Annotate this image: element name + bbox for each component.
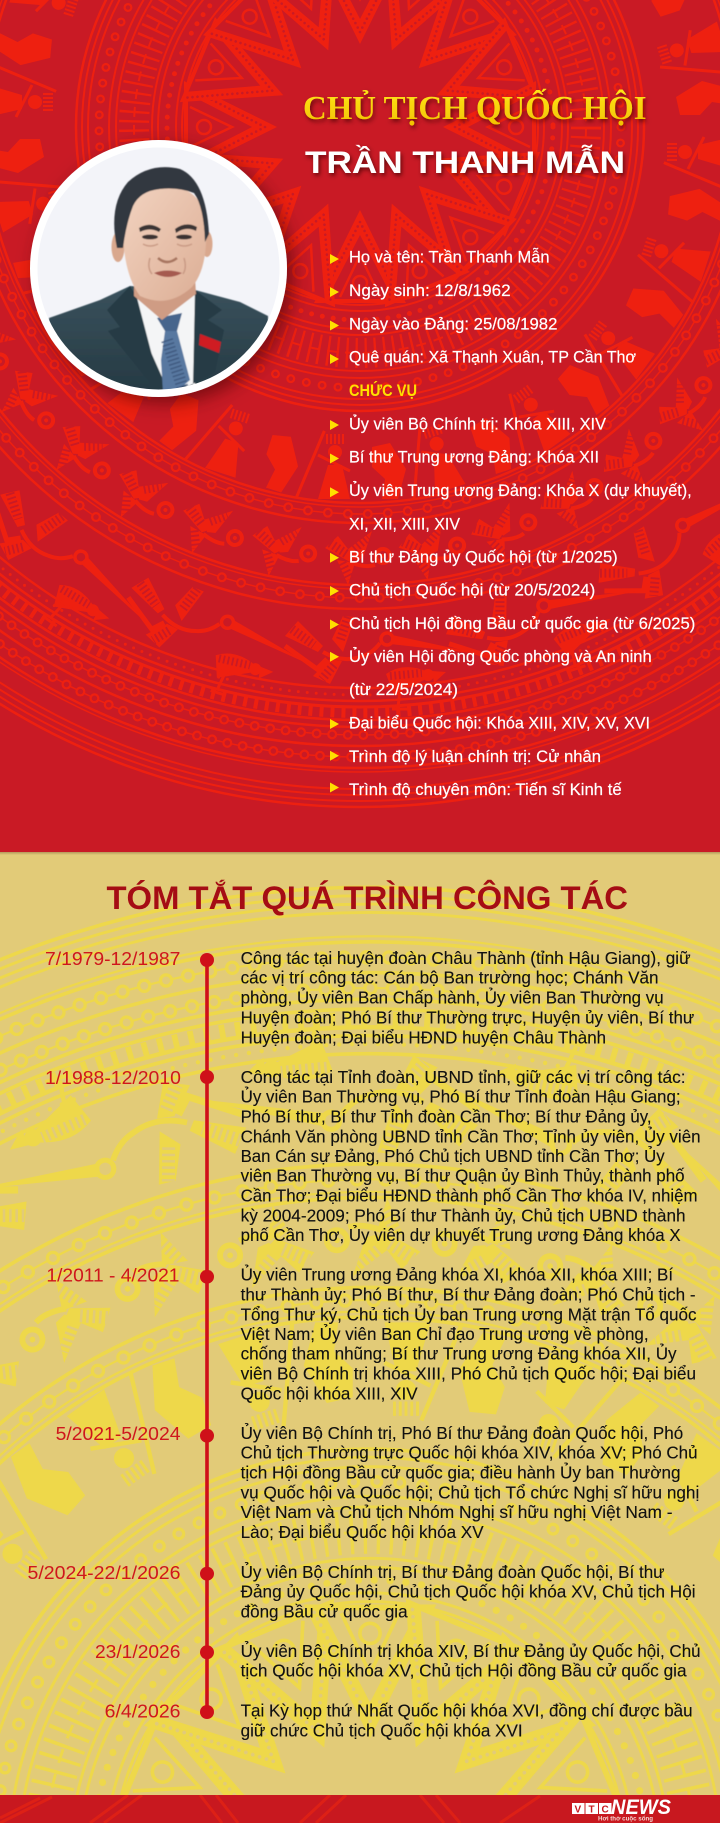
timeline entry: 5/2024-22/1/2026: Đảng ủy Quốc hội, Chủ tịch Quốc hội khóa XV, Chủ tịch Hội [241,1582,696,1602]
title: Trần Thanh Mẫn: TRẦN THANH MẪN [305,144,625,180]
timeline entry: 6/4/2026 [105,1701,693,1740]
timeline entry: 5/2024-22/1/2026 [28,1561,696,1622]
timeline entry: 7/1979-12/1987: 7/1979-12/1987 [45,949,180,969]
list item: Central Committee: XI, XII, XIII, XIV [349,514,461,533]
list item: full name: Họ và tên: Trần Thanh Mẫn [349,248,550,267]
timeline entry: 1/1988-12/2010 [45,1067,701,1245]
timeline entry: 5/2024-22/1/2026: Ủy viên Bộ Chính trị, Bí thư Đảng đoàn Quốc hội, Bí thư [241,1561,665,1582]
timeline entry: 6/4/2026: 6/4/2026 [105,1702,180,1722]
timeline entry: 5/2021-5/2024: Lào; Đại biểu Quốc hội khóa XV [241,1522,484,1542]
timeline entry: 5/2021-5/2024: Ủy viên Bộ Chính trị, Phó Bí thư Đảng đoàn Quốc hội, Phó [241,1422,683,1443]
timeline entry: 23/1/2026: Ủy viên Bộ Chính trị khóa XIV, Bí thư Đảng ủy Quốc hội, Chủ [241,1640,701,1661]
timeline [28,948,701,1740]
timeline entry: 1/1988-12/2010: Công tác tại Tỉnh đoàn, UBND tỉnh, giữ các vị trí công tác: [241,1067,686,1087]
timeline entry: 1/1988-12/2010: Phó Bí thư, Bí thư Tỉnh đoàn Cần Thơ; Bí thư Đảng ủy, [241,1106,652,1126]
heading: career summary: TÓM TẮT QUÁ TRÌNH CÔNG TÁC [106,880,628,916]
timeline entry: 1/1988-12/2010: Ủy viên Ban Thường vụ, Phó Bí thư Tỉnh đoàn Hậu Giang; [241,1086,681,1107]
list item: Central Committee: Ủy viên Trung ương Đảng: Khóa X (dự khuyết), [349,481,692,500]
timeline entry: 5/2024-22/1/2026: 5/2024-22/1/2026 [28,1563,180,1583]
timeline entry: 23/1/2026: 23/1/2026 [95,1642,180,1662]
list item: party admission date: Ngày vào Đảng: 25/08/1982 [349,314,557,333]
list item: political theory level: Trình độ lý luận chính trị: Cử nhân [349,747,601,766]
panel: career section background [0,852,720,1795]
list item: hometown: Quê quán: Xã Thạnh Xuân, TP Cần Thơ [349,348,636,367]
list item: election council chairman: Chủ tịch Hội đồng Bầu cử quốc gia (từ 6/2025) [349,614,695,633]
subheading: positions: CHỨC VỤ [349,381,417,400]
timeline entry: 1/2011 - 4/2021: 1/2011 - 4/2021 [46,1266,180,1286]
timeline entry: 1/1988-12/2010: Cần Thơ; Đại biểu HĐND thành phố Cần Thơ khóa IV, nhiệm [241,1186,698,1206]
portrait photo in white circular frame [30,140,290,400]
list item: professional level: Trình độ chuyên môn: Tiến sĩ Kinh tế [349,780,622,799]
timeline entry: 1/2011 - 4/2021: thư Thành ủy; Phó Bí thư, Bí thư Đảng đoàn; Phó Chủ tịch - [241,1284,696,1304]
logo: VTC News: T [588,1804,595,1816]
timeline entry: 1/2011 - 4/2021: chống tham nhũng; Bí thư Trung ương Đảng khóa XII, Ủy [241,1343,677,1364]
list item: Central Committee [330,481,692,533]
timeline entry: 1/1988-12/2010: 1/1988-12/2010 [45,1068,181,1088]
list item: National Assembly deputy: Đại biểu Quốc hội: Khóa XIII, XIV, XV, XVI [349,714,650,733]
timeline entry: 1/1988-12/2010: Ban Cán sự Đảng, Phó Chủ tịch UBND tỉnh Cần Thơ; Ủy [241,1145,665,1166]
timeline entry: 5/2021-5/2024: Việt Nam và Chủ tịch Nhóm Nghị sĩ hữu nghị Việt Nam - [241,1502,673,1522]
timeline entry: 5/2021-5/2024: vụ Quốc hội và Quốc hội; Chủ tịch Tổ chức Nghị sĩ hữu nghị [241,1482,699,1502]
timeline entry: 6/4/2026: giữ chức Chủ tịch Quốc hội khóa XVI [241,1720,523,1740]
list item: defence and security council: (từ 22/5/2024) [349,680,458,699]
panel: footer band [0,1795,720,1823]
timeline entry: 5/2024-22/1/2026: đồng Bầu cử quốc gia [241,1602,408,1622]
timeline entry: 1/2011 - 4/2021: Ủy viên Trung ương Đảng khóa XI, khóa XII, khóa XIII; Bí [241,1264,673,1285]
logo: VTC News: Hơi thở cuộc sống [598,1814,653,1822]
timeline entry: 7/1979-12/1987: Huyện đoàn; Phó Bí thư Thường trực, Huyện ủy viên, Bí thư [241,1007,694,1027]
timeline entry: 1/2011 - 4/2021: Quốc hội khóa XIII, XIV [241,1383,418,1403]
timeline entry: 6/4/2026: Tại Kỳ họp thứ Nhất Quốc hội khóa XVI, đồng chí được bầu [241,1701,693,1721]
timeline entry: 7/1979-12/1987: các vị trí công tác: Cán bộ Ban trường học; Chánh Văn [241,968,659,988]
timeline entry: 1/1988-12/2010: phố Cần Thơ, Ủy viên dự khuyết Trung ương Đảng khóa X [241,1224,681,1245]
timeline entry: 7/1979-12/1987 [45,948,694,1047]
logo: VTC News: C [602,1804,609,1816]
timeline entry: 7/1979-12/1987: phòng, Ủy viên Ban Chấp hành, Ủy viên Ban Thường vụ [241,987,664,1008]
list item: Party Committee secretary: Bí thư Đảng ủy Quốc hội (từ 1/2025) [349,548,618,567]
timeline entry: 1/2011 - 4/2021 [46,1264,697,1403]
logo: VTC News: V [574,1804,582,1816]
timeline entry: 5/2021-5/2024 [56,1422,699,1542]
timeline entry: 5/2021-5/2024: tịch Hội đồng Bầu cử quốc gia; điều hành Ủy ban Thường [241,1462,681,1483]
timeline entry: 1/2011 - 4/2021: viên Bộ Chính trị khóa XIII, Phó Chủ tịch Quốc hội; Đại biểu [241,1364,696,1384]
list item: defence and security council [330,647,652,699]
timeline entry: 23/1/2026 [95,1640,701,1681]
personal information list [330,248,695,799]
logo: VTC News: NEWS [611,1796,671,1819]
timeline entry: 5/2021-5/2024: 5/2021-5/2024 [56,1424,180,1444]
timeline entry: 1/1988-12/2010: viên Ban Thường vụ, Bí thư Quận ủy Bình Thủy, thành phố [241,1166,685,1186]
timeline entry: 1/1988-12/2010: kỳ 2004-2009; Phó Bí thư Thành ủy, Chủ tịch UBND thành [241,1205,686,1225]
panel: profile section background [0,0,720,852]
timeline entry: 1/2011 - 4/2021: Tổng Thư ký, Chủ tịch Ủy ban Trung ương Mặt trận Tổ quốc [241,1303,697,1324]
list item: Secretariat: Bí thư Trung ương Đảng: Khóa XII [349,448,599,467]
timeline entry: 7/1979-12/1987: Công tác tại huyện đoàn Châu Thành (tỉnh Hậu Giang), giữ [241,948,691,968]
timeline entry: 7/1979-12/1987: Huyện đoàn; Đại biểu HĐND huyện Châu Thành [241,1027,606,1047]
logo: VTC News [572,1796,671,1822]
list item: date of birth: Ngày sinh: 12/8/1962 [349,281,511,300]
list item: National Assembly chairman: Chủ tịch Quốc hội (từ 20/5/2024) [349,581,595,600]
timeline entry: 1/2011 - 4/2021: Việt Nam; Ủy viên Ban Chỉ đạo Trung ương về phòng, [241,1323,649,1344]
timeline vertical line [205,960,209,1712]
timeline entry: 5/2021-5/2024: Chủ tịch Thường trực Quốc hội khóa XIV, khóa XV; Phó Chủ [241,1443,698,1463]
list item: defence and security council: Ủy viên Hội đồng Quốc phòng và An ninh [349,647,652,666]
title: Chủ tịch Quốc hội: CHỦ TỊCH QUỐC HỘI [303,88,646,127]
list item: Politburo: Ủy viên Bộ Chính trị: Khóa XIII, XIV [349,414,607,433]
timeline entry: 1/1988-12/2010: Chánh Văn phòng UBND tỉnh Cần Thơ; Tỉnh ủy viên, Ủy viên [241,1125,701,1146]
timeline entry: 23/1/2026: tịch Quốc hội khóa XV, Chủ tịch Hội đồng Bầu cử quốc gia [241,1661,687,1681]
